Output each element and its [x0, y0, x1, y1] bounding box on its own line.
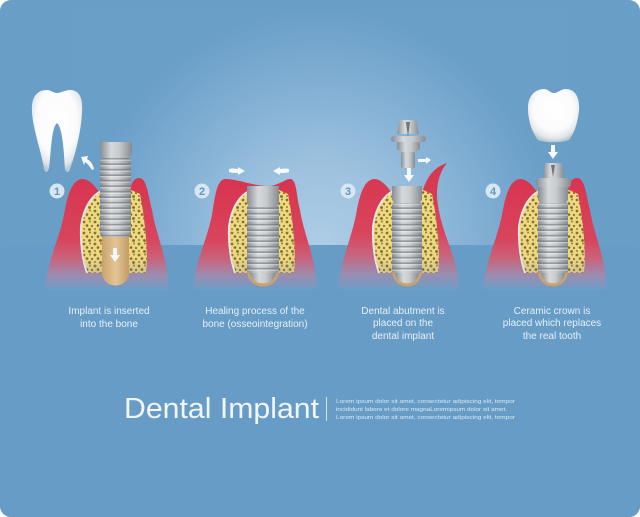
gum and bone socket: [193, 179, 317, 290]
implant screw: [100, 142, 132, 237]
number badge 3: [340, 184, 356, 198]
number badge 1: 1: [54, 186, 60, 198]
caption 4: Ceramic crown is: [514, 306, 590, 317]
caption 4: the real tooth: [523, 331, 581, 342]
icon: gum flap arrow: [418, 157, 431, 164]
icon: down arrow: [404, 168, 414, 182]
description text: Lorem ipsum dolor sit amet, consectetur adipiscing elit, tempor: [336, 399, 515, 405]
number badge 1: [50, 184, 64, 198]
implant screw: [392, 186, 422, 286]
icon: down arrow: [548, 145, 558, 159]
caption 1: Implant is inserted: [68, 306, 150, 317]
caption 3: dental implant: [372, 331, 434, 342]
divider: [326, 397, 327, 421]
description text: Lorem ipsum dolor sit amet, consectetur adipiscing elit, tempor: [336, 415, 515, 421]
panel: step 3 abutment placed: [338, 120, 460, 290]
icon: left gum arrow: [229, 167, 245, 175]
caption 3: Dental abutment is: [361, 306, 445, 317]
description text: incididunt labore et dolore magnaLoremipsum dolor sit amet.: [336, 407, 507, 413]
caption 1: into the bone: [80, 319, 138, 330]
number badge 4: [486, 184, 500, 198]
abutment: [391, 120, 426, 168]
caption 3: placed on the: [373, 318, 433, 329]
number badge 2: 2: [199, 186, 205, 198]
implant screw with abutment: [536, 163, 571, 286]
gum and bone socket: [338, 163, 460, 290]
icon: down arrow: [110, 248, 120, 262]
gum and bone socket: [483, 178, 607, 290]
icon: natural tooth: [32, 90, 82, 172]
caption 4: placed which replaces: [503, 318, 601, 329]
panel: step 1 implant inserted: [32, 90, 169, 290]
bone canal root: [102, 237, 129, 286]
panel: step 2 healing process: [193, 167, 317, 290]
icon: ceramic crown: [528, 89, 579, 142]
title: Dental Implant: [124, 393, 319, 425]
caption 2: bone (osseointegration): [202, 319, 308, 330]
panel: step 4 ceramic crown: [483, 89, 607, 290]
gum and bone socket: [45, 178, 169, 290]
implant screw: [247, 186, 279, 286]
icon: right gum arrow: [273, 167, 289, 175]
icon: removal arrow: [81, 156, 94, 170]
number badge 4: 4: [490, 186, 497, 198]
number badge 3: 3: [345, 186, 351, 198]
caption 2: Healing process of the: [205, 306, 305, 317]
